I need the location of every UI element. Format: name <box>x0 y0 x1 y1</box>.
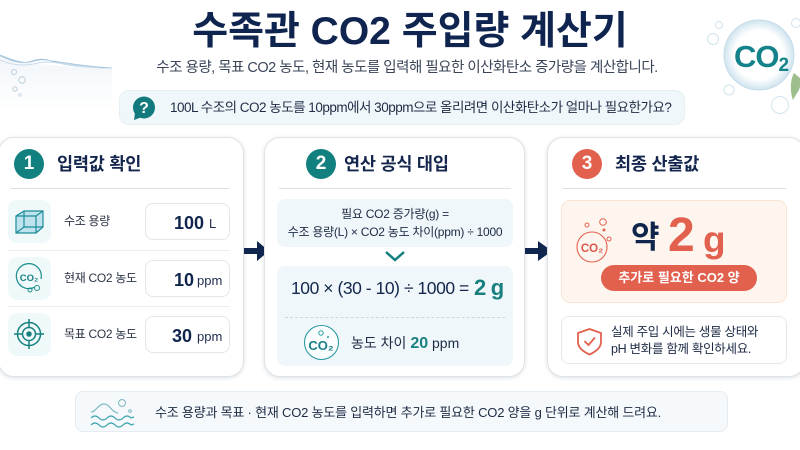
icon: CO2 circle <box>304 325 340 360</box>
footer note <box>75 391 728 432</box>
icon: CO2 bubble: CO <box>734 39 778 74</box>
value <box>145 203 230 240</box>
formula line 1: 필요 CO2 증가량(g) = <box>341 207 449 221</box>
note text <box>611 325 758 356</box>
result value: 약 <box>631 220 660 255</box>
label: 목표 CO2 농도 <box>64 327 137 341</box>
row: target CO2 <box>8 313 230 356</box>
row: current CO2 <box>8 257 230 300</box>
value <box>145 316 230 353</box>
icon: waves <box>90 398 134 428</box>
label: 현재 CO2 농도 <box>64 271 137 285</box>
question text: 100L 수조의 CO2 농도를 10ppm에서 30ppm으로 올리려면 이산화탄소가 얼마나 필요한가요? <box>170 100 671 115</box>
step 3 heading: 최종 산출값 <box>615 154 699 174</box>
arrow 1 <box>244 241 264 261</box>
icon: shield <box>577 328 602 356</box>
formula line 2: 수조 용량(L) × CO2 농도 차이(ppm) ÷ 1000 <box>288 225 502 239</box>
panel: formula <box>264 137 525 377</box>
value <box>145 260 230 297</box>
title: 수족관 CO2 주입량 계산기 <box>192 10 628 53</box>
value: 30 <box>172 326 192 346</box>
value: 100 <box>174 213 204 233</box>
result pill <box>601 265 757 291</box>
icon: CO2: CO₂ <box>20 273 38 284</box>
value: ppm <box>197 273 222 288</box>
icon: tank <box>8 200 51 243</box>
concentration difference: 농도 차이 20 ppm <box>351 335 459 352</box>
calculation result: 2 g <box>474 275 503 300</box>
icon: CO2 <box>8 257 51 300</box>
icon: question bubble: ? <box>139 100 149 117</box>
row: tank volume <box>8 200 230 243</box>
icon: chevron <box>385 251 405 262</box>
question banner <box>119 90 685 125</box>
note text: 실제 주입 시에는 생물 상태와 <box>611 325 758 339</box>
icon: CO2 bubble <box>707 18 800 114</box>
label: 수조 용량 <box>64 214 110 228</box>
icon: CO2 bubbles: CO₂ <box>581 243 603 255</box>
panel: input values <box>0 137 244 377</box>
formula box <box>277 199 513 247</box>
decoration: water surface and bubbles <box>0 54 112 97</box>
calculation text: 100 × (30 - 10) ÷ 1000 = <box>291 278 469 298</box>
step 3 badge: 3 <box>582 153 592 174</box>
note box <box>561 316 787 364</box>
value: ppm <box>197 329 222 344</box>
result unit: g <box>703 219 726 260</box>
step 2 badge <box>306 149 336 179</box>
step 2 heading: 연산 공식 대입 <box>344 154 449 174</box>
result pill: 추가로 필요한 CO2 양 <box>618 270 740 285</box>
step 2 badge: 2 <box>316 153 326 174</box>
step 1 heading: 입력값 확인 <box>57 154 141 174</box>
icon: CO2 bubble: 2 <box>778 55 788 76</box>
icon: CO2 circle: CO₂ <box>308 338 334 353</box>
icon: target <box>8 313 51 356</box>
step 3 badge <box>572 149 602 179</box>
icon: question bubble <box>133 96 155 120</box>
note text: pH 변화를 함께 확인하세요. <box>611 342 751 356</box>
subtitle: 수조 용량, 목표 CO2 농도, 현재 농도를 입력해 필요한 이산화탄소 증가량을 계산합니다. <box>156 60 658 76</box>
result box <box>561 200 787 303</box>
panel: result <box>547 137 800 377</box>
step 1 badge: 1 <box>24 153 34 174</box>
result number: 2 <box>668 209 695 262</box>
value: L <box>209 216 216 231</box>
step 1 badge <box>14 149 44 179</box>
calculation box <box>277 266 513 366</box>
arrow 2 <box>525 241 547 261</box>
value: 10 <box>174 270 194 290</box>
icon: CO2 bubbles <box>576 218 612 262</box>
footer text: 수조 용량과 목표 · 현재 CO2 농도를 입력하면 추가로 필요한 CO2 양을 g 단위로 계산해 드려요. <box>155 405 661 420</box>
